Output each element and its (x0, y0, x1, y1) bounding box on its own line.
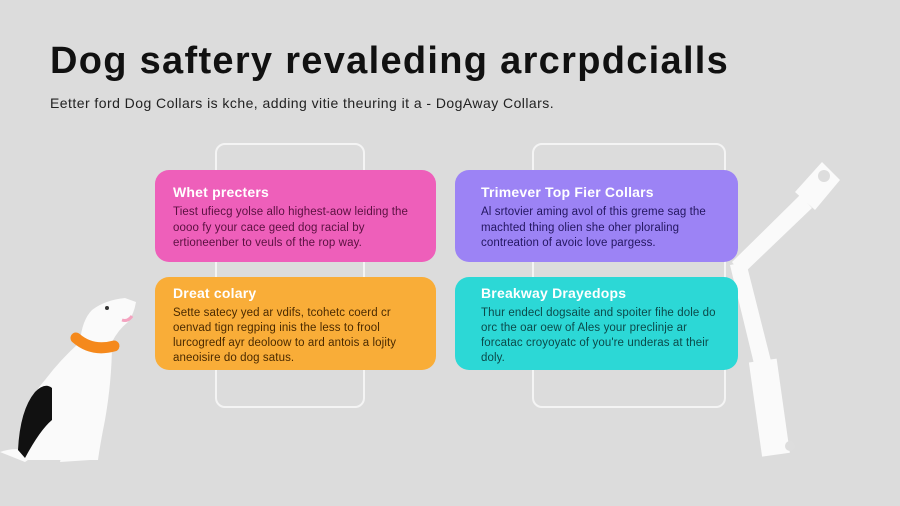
card: what precters: Whet precters (173, 184, 269, 200)
frame: left (215, 143, 365, 408)
card: top collars (455, 170, 738, 262)
card: breakway (455, 277, 738, 370)
card: dreat colary: Dreat colary (173, 285, 256, 301)
card: top collars: Al srtovier aming avol of this greme sag the machted thing olien she oher ploraling contreation of avoic love pargess. (481, 206, 706, 249)
icon: dog (0, 298, 136, 462)
card: dreat colary (155, 277, 436, 370)
card: top collars: Trimever Top Fier Collars (481, 184, 654, 200)
card: what precters: Tiest ufiecg yolse allo highest-aow leiding the oooo fy your cace geed dog racial by ertioneenber to veuls of the rop way. (173, 206, 408, 249)
card: breakway: Breakway Drayedops (481, 285, 626, 301)
card: breakway: Thur endecl dogsaite and spoiter fihe dole do orc the oar oew of Ales your preclinje ar forcatac croyoyatc of you're underas at their doly. (481, 307, 716, 364)
icon: white tool (730, 162, 840, 456)
frame: right (532, 143, 726, 408)
card: dreat colary: Sette satecy yed ar vdifs, tcohetc coerd cr oenvad tign regping inis the less to frool lurcogredf ayr deoloow to ard antois a lojity aneoisire do dog satus. (173, 307, 396, 364)
card: what precters (155, 170, 436, 262)
title: Dog saftery revaleding arcrpdcialls (50, 40, 729, 82)
subtitle: Eetter ford Dog Collars is kche, adding vitie theuring it a - DogAway Collars. (50, 95, 554, 111)
